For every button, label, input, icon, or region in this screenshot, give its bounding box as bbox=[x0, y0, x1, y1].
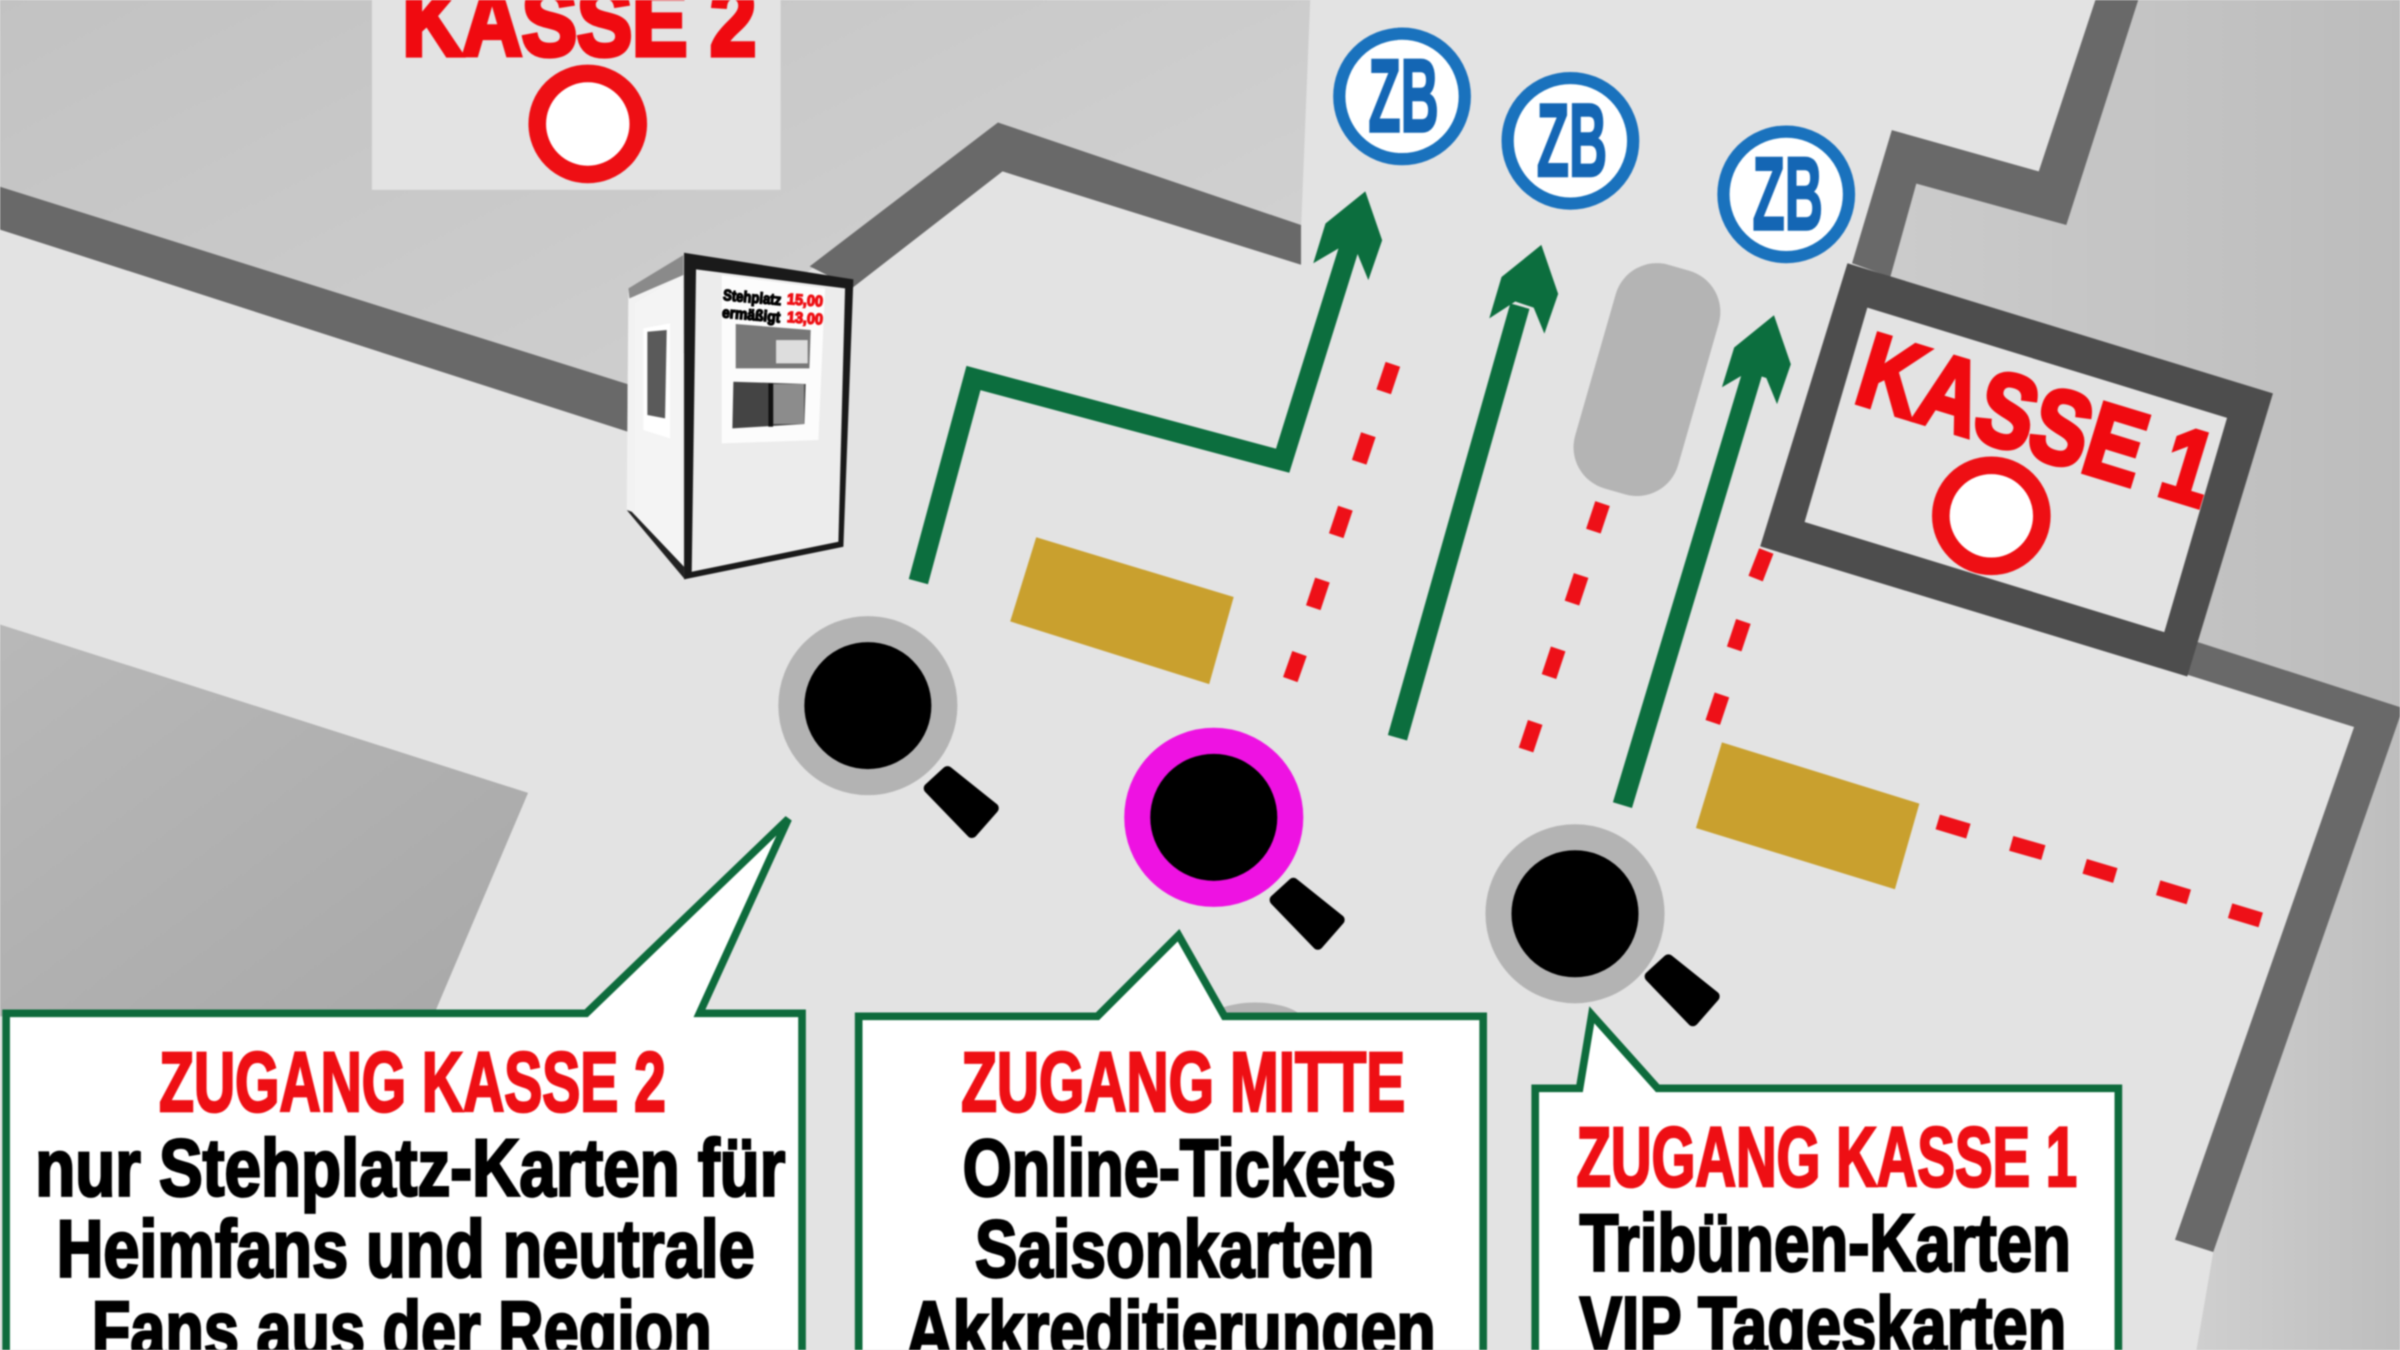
marker: Kasse 1 circle bbox=[1941, 465, 2042, 566]
arrow: route 1 bbox=[918, 191, 1382, 582]
callout text bbox=[1580, 1198, 2071, 1350]
callout text: Heimfans und neutrale bbox=[57, 1205, 755, 1295]
callout text: Online-Tickets bbox=[963, 1123, 1396, 1213]
upper left building area bbox=[0, 0, 1310, 390]
gold barrier left bbox=[1010, 537, 1234, 684]
obstacle behind middle callout bbox=[1206, 1003, 1304, 1042]
icon: ZB badge 2 bbox=[1508, 78, 1633, 204]
icon: ZB badge 3 bbox=[1723, 132, 1849, 257]
icon: ZB badge 2: ZB bbox=[1537, 83, 1607, 199]
arrow: route 2 bbox=[1397, 245, 1558, 738]
icon: ZB badge 3: ZB bbox=[1753, 137, 1823, 253]
price list: ermäßigt bbox=[721, 304, 781, 326]
price list: 13,00 bbox=[786, 309, 824, 329]
panel: Kasse 2 area bbox=[372, 0, 781, 190]
callout text bbox=[35, 1123, 785, 1350]
icon: entry marker Mitte bbox=[1137, 741, 1339, 944]
callout heading: ZUGANG KASSE 2 bbox=[159, 1035, 666, 1129]
kiosk: ticket booth bbox=[627, 253, 853, 579]
icon: entry marker Kasse 2 bbox=[791, 629, 993, 833]
green route arrows bbox=[918, 191, 1791, 805]
callout heading: ZUGANG MITTE bbox=[961, 1035, 1405, 1129]
callout text: Tribünen-Karten bbox=[1580, 1198, 2071, 1288]
panel: Kasse 1 building bbox=[1760, 263, 2273, 677]
callout text bbox=[906, 1123, 1436, 1350]
marker: Kasse 2 circle bbox=[537, 73, 638, 174]
gold barrier right bbox=[1696, 742, 1919, 889]
icon: entry marker Kasse 1 bbox=[1498, 837, 1714, 1021]
barrier: grey rounded block bbox=[1563, 253, 1730, 506]
lower right building area bbox=[2196, 712, 2400, 1350]
price list bbox=[721, 287, 824, 329]
callout: Zugang Kasse 1 bbox=[1535, 1015, 2118, 1350]
callout: Zugang Mitte bbox=[859, 935, 1483, 1350]
right building area bbox=[1890, 0, 2400, 716]
arrow: route 3 bbox=[1622, 315, 1791, 805]
price list: 15,00 bbox=[786, 291, 824, 311]
icon: ZB badge 1 bbox=[1339, 34, 1465, 159]
callout text: Saisonkarten bbox=[975, 1205, 1374, 1295]
icon: ZB badge 1: ZB bbox=[1368, 39, 1439, 155]
label: Kasse 1: KASSE 1 bbox=[1845, 312, 2228, 530]
red dashed barriers bbox=[1290, 364, 2261, 920]
callout text: nur Stehplatz-Karten für bbox=[35, 1123, 785, 1213]
callout heading: ZUGANG KASSE 1 bbox=[1577, 1110, 2077, 1204]
callout: Zugang Kasse 2 bbox=[6, 819, 802, 1350]
lower left building area bbox=[0, 624, 528, 1016]
price list: Stehplatz bbox=[722, 287, 782, 309]
